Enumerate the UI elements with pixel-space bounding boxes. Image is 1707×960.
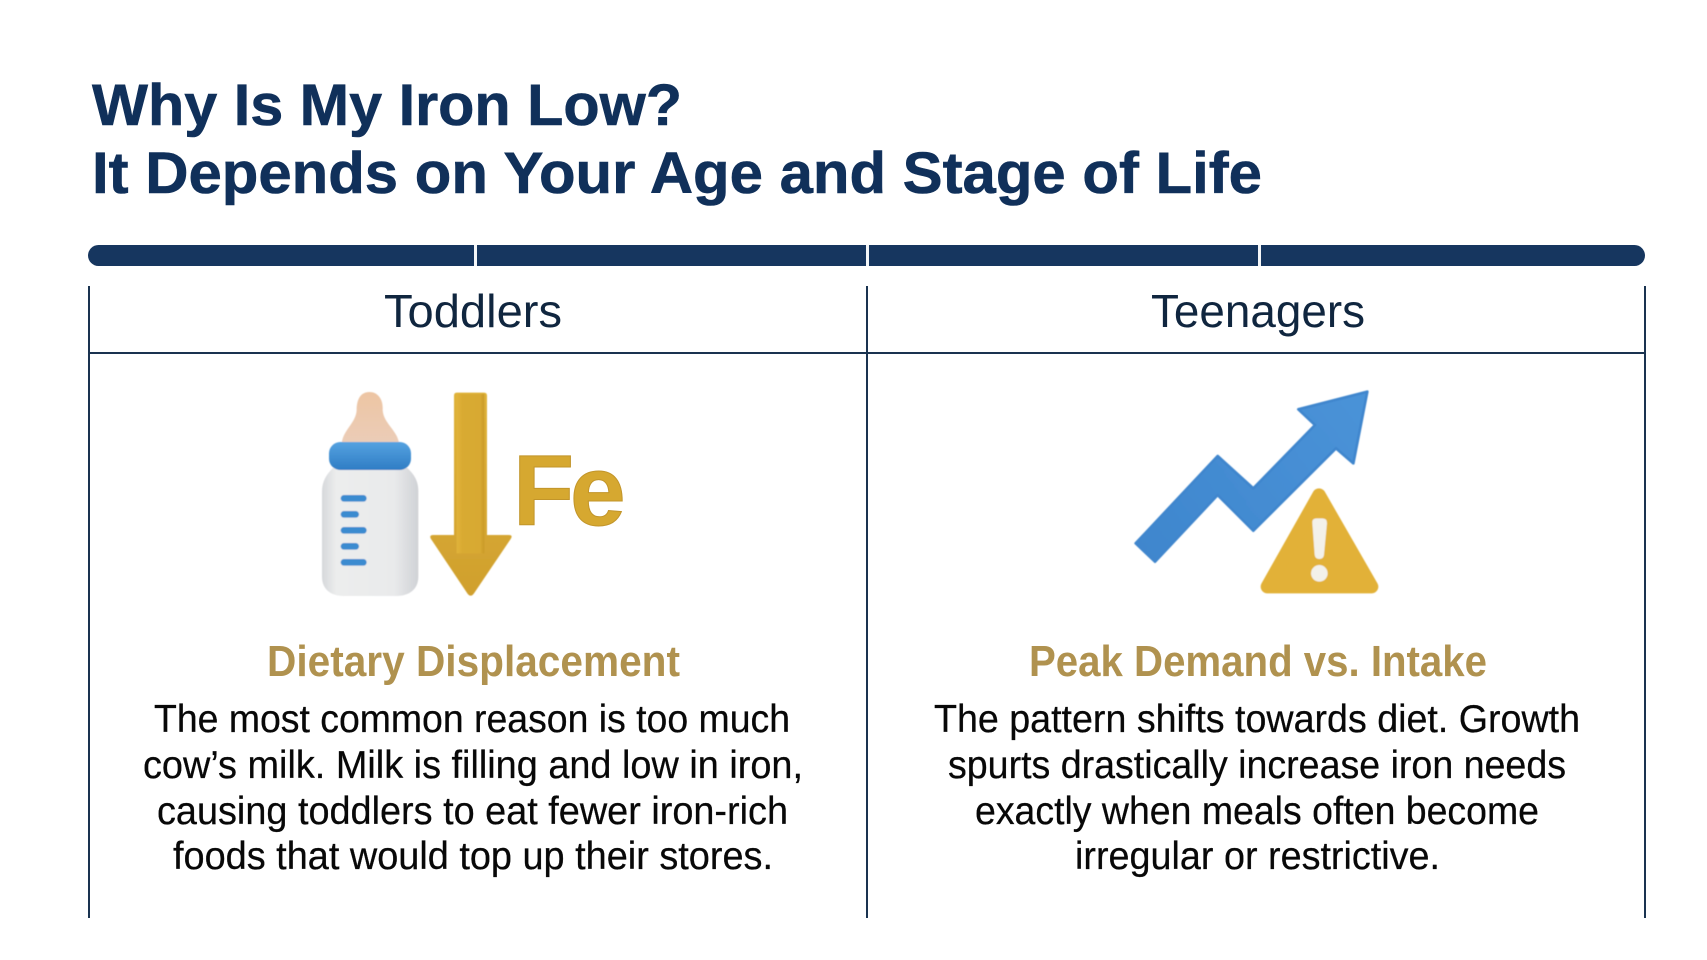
text block: teenagers explanation xyxy=(934,698,1580,878)
text block: toddlers explanation: causing toddlers to eat fewer iron-rich xyxy=(157,790,788,833)
title: Why Is My Iron Low? xyxy=(92,73,682,138)
subheading: peak demand vs intake: Peak Demand vs. Intake xyxy=(1029,637,1487,686)
panel: toddlers xyxy=(143,285,803,878)
text block: toddlers explanation: The most common reason is too much xyxy=(154,698,790,741)
icon: warning triangle xyxy=(1267,495,1372,587)
text block: toddlers explanation xyxy=(143,698,803,878)
text block: toddlers explanation: foods that would top up their stores. xyxy=(173,835,773,878)
heading: teenagers: Teenagers xyxy=(1151,285,1365,337)
title xyxy=(92,73,1262,206)
comparison table grid xyxy=(88,286,1646,918)
title: It Depends on Your Age and Stage of Life xyxy=(92,141,1262,206)
text block: toddlers explanation: cow’s milk. Milk is filling and low in iron, xyxy=(143,744,803,787)
text block: teenagers explanation: irregular or restrictive. xyxy=(1075,835,1440,878)
text block: teenagers explanation: exactly when meals often become xyxy=(975,790,1539,833)
icon: Fe iron symbol: Fe xyxy=(513,435,626,547)
timeline bar with four segments xyxy=(88,245,1645,266)
panel: teenagers xyxy=(934,285,1580,878)
icon: gold down arrow xyxy=(430,393,512,596)
icon: baby bottle xyxy=(322,392,418,596)
icon: rising blue arrow xyxy=(1136,392,1367,562)
subheading: dietary displacement: Dietary Displacement xyxy=(267,637,680,686)
text block: teenagers explanation: The pattern shifts towards diet. Growth xyxy=(934,698,1580,741)
text block: teenagers explanation: spurts drastically increase iron needs xyxy=(948,744,1566,787)
heading: toddlers: Toddlers xyxy=(384,285,562,337)
